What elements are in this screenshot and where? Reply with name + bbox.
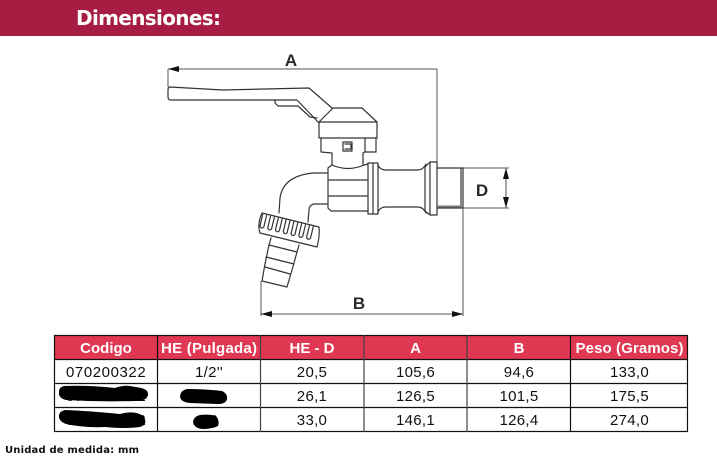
row 2: 3/4'' [195,388,223,405]
row 1: 20,5 [297,364,327,381]
row 1: 105,6 [396,364,435,381]
row 3: 33,0 [297,412,327,429]
row 1: 133,0 [610,364,649,381]
dimension A: A [285,51,297,70]
valve body [328,163,378,214]
row 2: 101,5 [499,388,539,405]
pipe neck and hex nut [378,162,437,215]
footer note: unit of measure: Unidad de medida: mm [5,445,139,456]
dimension A [168,51,437,162]
dimension D [463,168,509,208]
lever handle [168,87,332,123]
row 2: 175,5 [610,388,649,405]
table header row: HE (Pulgada) [161,340,257,357]
row 1: 070200322 [66,364,146,381]
technical drawing: faucet [168,51,509,317]
valve head [319,108,377,165]
spout [279,173,328,222]
row 2: 070200422 [66,388,146,405]
table grid [54,335,688,432]
row 3: 1'' [202,412,216,429]
table header row: Codigo [80,340,132,357]
header banner [0,0,717,36]
row 1: 94,6 [504,364,534,381]
title: Dimensiones: [76,6,221,30]
row 3: 274,0 [610,412,649,429]
row 3: 146,1 [396,412,435,429]
table header row: Peso (Gramos) [576,340,684,357]
row 1 [66,364,649,381]
table header row: HE - D [290,340,335,357]
table header row [54,335,688,359]
hose connector [262,238,299,287]
table header row: A [410,340,421,357]
threaded end [437,168,463,208]
dimension B [261,208,463,317]
row 1: 1/2'' [195,364,223,381]
redaction marks [59,386,227,429]
row 2: 26,1 [297,388,327,405]
spec table [54,335,688,432]
row 3: 070200522 [66,412,146,429]
row 2 [66,388,649,405]
dimension B: B [353,294,365,313]
row 2: 126,5 [396,388,435,405]
row 3: 126,4 [499,412,539,429]
table header row: B [514,340,525,357]
row 3 [66,412,649,429]
dimension D: D [476,181,488,200]
ribbed nut [259,213,319,247]
